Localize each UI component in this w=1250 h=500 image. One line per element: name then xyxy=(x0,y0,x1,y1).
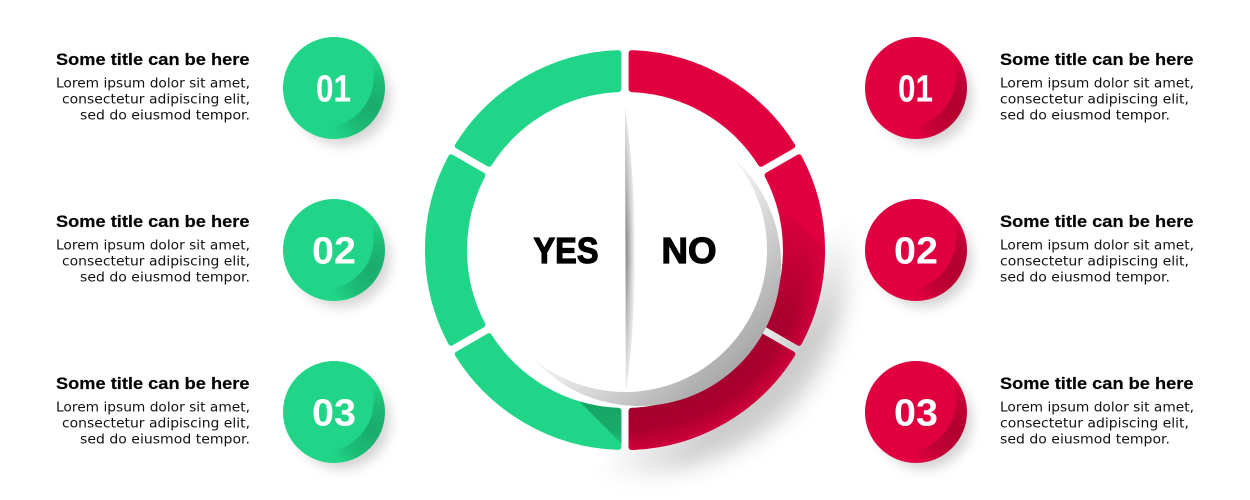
green badge 02 xyxy=(283,199,390,307)
right 03 text: consectetur adipiscing elit, xyxy=(1000,416,1189,432)
disc crescent shadow xyxy=(497,122,781,406)
left 03 text xyxy=(56,375,250,448)
right 02 text: Lorem ipsum dolor sit amet, xyxy=(1000,238,1194,254)
red badge 01 xyxy=(865,37,972,145)
ring outer drop shadow xyxy=(620,244,854,480)
red badge 02 xyxy=(865,199,972,307)
left 02 text: consectetur adipiscing elit, xyxy=(62,254,250,270)
green badge 01: 01 xyxy=(316,68,351,110)
left item 03 xyxy=(56,361,390,469)
left 02 text: sed do eiusmod tempor. xyxy=(80,270,250,286)
right 03 text: Lorem ipsum dolor sit amet, xyxy=(1000,400,1194,416)
left 01 text xyxy=(56,51,250,124)
right 02 text: consectetur adipiscing elit, xyxy=(1000,254,1189,270)
centre divider fold xyxy=(625,109,635,390)
long shadow on ring xyxy=(579,220,826,450)
right 01 text: Some title can be here xyxy=(1000,51,1194,69)
red badge 02: 02 xyxy=(894,230,938,272)
left 02 text xyxy=(56,213,250,286)
left 03 text: Some title can be here xyxy=(56,375,249,393)
right 01 text xyxy=(1000,51,1194,124)
right 02 text: Some title can be here xyxy=(1000,213,1194,231)
white centre disc xyxy=(483,108,767,392)
right 03 text: sed do eiusmod tempor. xyxy=(1000,432,1170,448)
red badge 03 xyxy=(865,361,972,469)
right 01 text: consectetur adipiscing elit, xyxy=(1000,92,1189,108)
left 01 text: consectetur adipiscing elit, xyxy=(62,92,250,108)
green badge 02: 02 xyxy=(312,230,356,272)
green badge 03 xyxy=(283,361,390,469)
label: no: NO xyxy=(662,230,716,271)
green badge 03: 03 xyxy=(312,392,356,434)
right 01 text: Lorem ipsum dolor sit amet, xyxy=(1000,76,1194,92)
red badge 01: 01 xyxy=(898,68,933,110)
red badge 03: 03 xyxy=(894,392,938,434)
green ring: yes segments xyxy=(428,53,618,447)
left item 02 xyxy=(56,199,390,307)
red ring: no segments xyxy=(632,53,822,447)
left 01 text: Lorem ipsum dolor sit amet, xyxy=(56,76,250,92)
label: yes: YES xyxy=(534,230,598,271)
right item 03 xyxy=(865,361,1194,469)
central yes/no diagram xyxy=(428,53,845,470)
left 03 text: sed do eiusmod tempor. xyxy=(80,432,250,448)
left 03 text: consectetur adipiscing elit, xyxy=(62,416,250,432)
right item 02 xyxy=(865,199,1194,307)
left 01 text: sed do eiusmod tempor. xyxy=(80,108,250,124)
white backing inside ring xyxy=(465,90,785,410)
right 01 text: sed do eiusmod tempor. xyxy=(1000,108,1170,124)
right item 01 xyxy=(865,37,1194,145)
green badge 01 xyxy=(283,37,390,145)
left item 01 xyxy=(56,37,390,145)
right 03 text xyxy=(1000,375,1194,448)
left 02 text: Some title can be here xyxy=(56,213,249,231)
left 01 text: Some title can be here xyxy=(56,51,249,69)
right 02 text: sed do eiusmod tempor. xyxy=(1000,270,1170,286)
left 02 text: Lorem ipsum dolor sit amet, xyxy=(56,238,250,254)
right 02 text xyxy=(1000,213,1194,286)
right 03 text: Some title can be here xyxy=(1000,375,1194,393)
left 03 text: Lorem ipsum dolor sit amet, xyxy=(56,400,250,416)
